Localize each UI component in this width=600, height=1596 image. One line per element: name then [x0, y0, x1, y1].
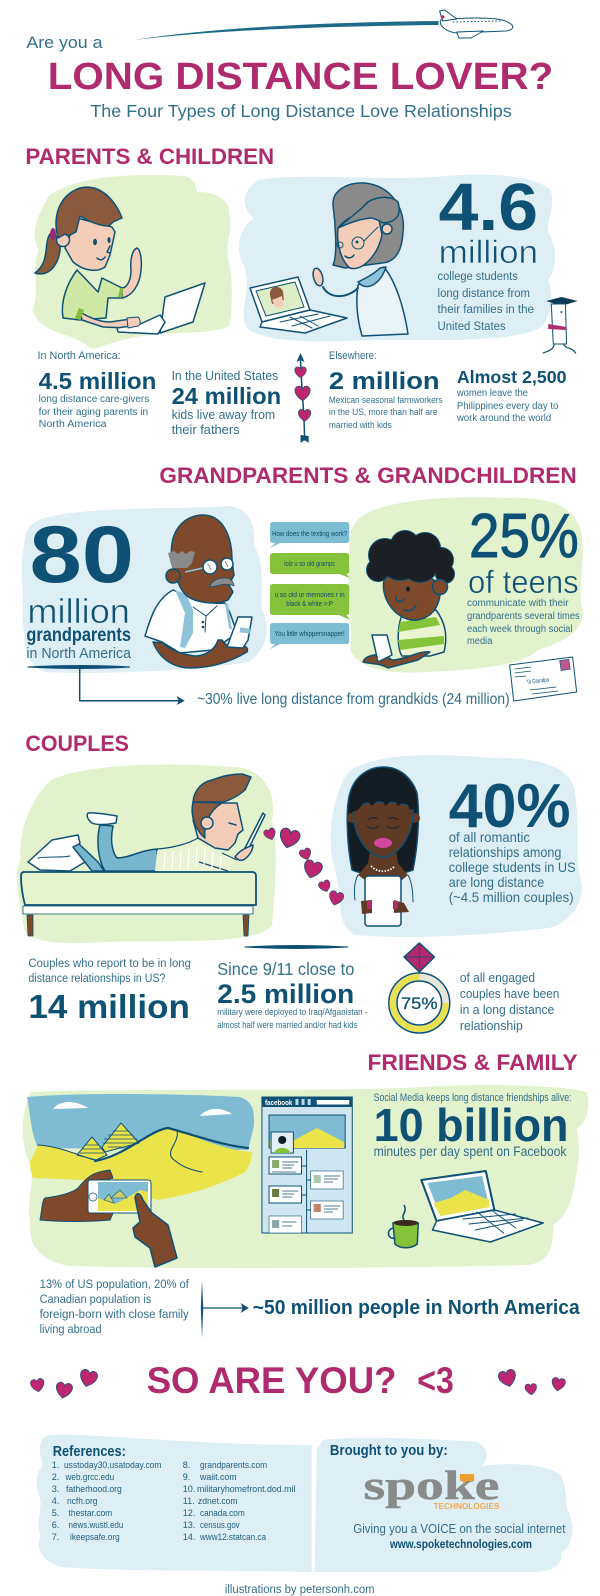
stat: US kids: their fathers — [172, 422, 240, 437]
reference list column two: 8. — [183, 1460, 190, 1470]
panel: references — [37, 1435, 312, 1572]
stat: 25 percent of teens: of teens — [468, 564, 579, 600]
reference list column two: 13. — [183, 1520, 195, 1530]
reference list column two: 10. — [183, 1484, 195, 1494]
reference list column one — [52, 1460, 161, 1542]
stat: 40 percent romantic: (~4.5 million couples) — [449, 889, 574, 905]
reference list column two: waiit.com — [199, 1472, 237, 1482]
title: LONG DISTANCE LOVER? — [48, 55, 553, 98]
illustration: facebook page — [262, 1097, 352, 1233]
stat: US kids: In the United States — [172, 368, 279, 383]
stat: North America caregivers: North America — [39, 418, 107, 430]
stat: 40 percent romantic: 40% — [449, 771, 571, 841]
panel: grandparents and grandchildren — [22, 463, 583, 708]
stat: 80 million grandparents: grandparents — [26, 625, 131, 646]
logo: spoke technologies: TECHNOLOGIES — [434, 1501, 500, 1511]
stat: 80 million grandparents: 80 — [29, 510, 134, 600]
stat: 25 percent of teens: grandparents several times — [467, 610, 580, 622]
stat: North America caregivers: 4.5 million — [39, 368, 156, 394]
stat: North America caregivers: In North America: — [38, 350, 121, 362]
reference list column one: fatherhood.org — [66, 1484, 122, 1494]
stat: 4.6 million students: their families in the — [438, 302, 534, 316]
stat: foreign born: 13% of US population, 20% of — [40, 1277, 189, 1291]
illustration: desert photo with hands — [27, 1094, 254, 1267]
stat: Philippines women: Philippines every day to — [457, 400, 558, 412]
call to action: <3 — [417, 1359, 454, 1401]
stat: Mexican farmworkers — [329, 350, 443, 431]
panel: references: References: — [53, 1443, 126, 1460]
logo: spoke technologies — [363, 1462, 500, 1511]
stat: 2.5 million military — [217, 946, 368, 1030]
stat: US kids — [172, 368, 281, 437]
chart: 75 percent ring: 75% — [401, 994, 438, 1013]
stat: Philippines women: Almost 2,500 — [457, 367, 566, 387]
stat: 4.6 million students: United States — [438, 319, 506, 333]
blue backdrop — [239, 175, 555, 342]
stat: 25 percent of teens: 25% — [469, 501, 579, 571]
stat: Mexican farmworkers: in the US, more than half are — [329, 407, 438, 418]
green backdrop — [17, 764, 276, 943]
reference list column one: thestar.com — [69, 1508, 112, 1518]
reference list column one: news.wustl.edu — [69, 1520, 123, 1530]
stat: 25 percent of teens: communicate with their — [467, 597, 569, 609]
stat: 50 million people: ~50 million people in North America — [253, 1297, 580, 1319]
stat: Philippines women: work around the world — [456, 412, 551, 424]
stat: 14 million couples: Couples who report to be in long — [28, 956, 191, 970]
blue backdrop — [331, 755, 582, 937]
stat: 30 percent live long distance: ~30% live long distance from grandkids (24 million) — [197, 690, 510, 708]
reference list column one: 4. — [52, 1496, 59, 1506]
chat bubble: reply two — [270, 584, 350, 620]
illustration: facebook page: facebook — [265, 1100, 292, 1107]
chart: 75 percent ring — [389, 943, 450, 1033]
reference list column one: 6. — [52, 1520, 59, 1530]
icon: right hearts — [497, 1369, 566, 1395]
reference list column one: 1. — [52, 1460, 59, 1470]
reference list column two: 12. — [183, 1508, 195, 1518]
stat: North America caregivers: for their aging parents in — [39, 406, 148, 418]
stat: 40 percent romantic: college students in US — [449, 859, 576, 875]
heading: COUPLES — [25, 731, 129, 756]
stat: foreign born — [40, 1277, 190, 1336]
stat: North America caregivers — [38, 350, 156, 430]
stat: foreign born: living abroad — [40, 1322, 102, 1336]
illustration: flying hearts — [263, 827, 345, 907]
stat: 4.6 million students: college students — [438, 269, 518, 283]
reference list column two: canada.com — [200, 1508, 245, 1518]
stat: 10 billion minutes: minutes per day spent on Facebook — [374, 1143, 567, 1159]
stat: foreign born: foreign-born with close family — [40, 1307, 190, 1321]
icon: airplane with trail — [134, 10, 513, 40]
call to action — [30, 1359, 566, 1401]
stat: 2.5 million military: almost half were married and/or had kids — [217, 1020, 358, 1030]
stat: engaged couples — [460, 970, 559, 1033]
stat: 40 percent romantic — [449, 771, 576, 905]
subtitle: The Four Types of Long Distance Love Relationships — [90, 101, 512, 121]
panel: sponsor: Giving you a VOICE on the social internet — [353, 1521, 566, 1536]
icon: arrow with hearts — [295, 353, 311, 443]
stat: 40 percent romantic: of all romantic — [449, 829, 530, 845]
illustration: boy with phone — [363, 530, 455, 668]
stat: Mexican farmworkers: Elsewhere: — [329, 350, 377, 362]
stat: 14 million couples: 14 million — [28, 989, 190, 1026]
chat bubble: question: How does the texting work? — [272, 531, 347, 538]
icon: left hearts — [30, 1369, 98, 1399]
stat: 25 percent of teens: each week through social — [467, 623, 573, 635]
stat: 40 percent romantic: are long distance — [449, 874, 544, 890]
reference list column one: 5. — [52, 1508, 59, 1518]
heading: GRANDPARENTS & GRANDCHILDREN — [159, 463, 577, 488]
reference list column one: ikeepsafe.org — [70, 1532, 120, 1542]
illustration: woman with tablet — [347, 767, 420, 926]
reference list column one: 7. — [52, 1532, 59, 1542]
reference list column two: www12.statcan.ca — [199, 1532, 267, 1542]
reference list column two: census.gov — [200, 1520, 240, 1530]
chat bubble: response: You little whippersnapper! — [275, 631, 345, 638]
stat: 25 percent of teens: media — [467, 635, 492, 647]
stat: 2.5 million military: 2.5 million — [217, 978, 354, 1009]
stat: 4.6 million students — [438, 170, 538, 333]
arrow: grandparents to long distance — [27, 666, 185, 705]
stat: 2.5 million military: Since 9/11 close to — [217, 959, 354, 979]
stat: 14 million couples: distance relationships in US? — [28, 971, 166, 985]
reference list column one: 2. — [52, 1472, 59, 1482]
stat: Mexican farmworkers: Mexican seasonal farmworkers — [329, 395, 443, 406]
reference list column two — [183, 1460, 295, 1542]
stat: Philippines women: women leave the — [456, 387, 528, 399]
stat: Mexican farmworkers: married with kids — [329, 420, 392, 431]
icon: envelope — [510, 657, 577, 701]
stat: engaged couples: relationship — [460, 1018, 523, 1033]
green backdrop — [32, 175, 232, 348]
stat: 80 million grandparents — [26, 510, 134, 662]
reference list column one: 3. — [52, 1484, 59, 1494]
reference list column two: 14. — [183, 1532, 195, 1542]
stat: 14 million couples — [28, 956, 191, 1026]
chat bubble: reply one — [270, 553, 350, 578]
reference list column one: web.grcc.edu — [65, 1472, 114, 1482]
panel: sponsor: www.spoketechnologies.com — [389, 1537, 532, 1551]
stat: 4.6 million students: long distance from — [438, 286, 530, 300]
heading: PARENTS & CHILDREN — [25, 144, 274, 169]
icon: diploma character — [543, 297, 578, 353]
chat bubble: reply one: lolz u so old gramps — [284, 561, 335, 568]
reference list column two: 9. — [183, 1472, 190, 1482]
stat: engaged couples: in a long distance — [460, 1002, 554, 1017]
reference list column two: militaryhomefront.dod.mil — [197, 1484, 295, 1494]
heading: FRIENDS & FAMILY — [368, 1050, 578, 1075]
green backdrop — [23, 1085, 588, 1268]
stat: North America caregivers: long distance care-givers — [39, 393, 149, 405]
chat bubble: reply two: u so old ur memories r in — [275, 592, 345, 599]
reference list column two: grandparents.com — [200, 1460, 267, 1470]
intro line: Are you a — [26, 33, 103, 52]
logo: spoke technologies: spoke — [363, 1462, 499, 1508]
stat: US kids: kids live away from — [172, 407, 275, 422]
illustration: mother on laptop — [250, 183, 408, 336]
panel: parents and children — [25, 144, 578, 443]
chat bubble: response — [270, 623, 349, 649]
stat: engaged couples: of all engaged — [460, 970, 535, 985]
illustration: girl on laptop — [35, 187, 205, 334]
stat: engaged couples: couples have been — [460, 986, 559, 1001]
illustration: grandfather with phone — [145, 515, 252, 668]
stat: 4.6 million students: 4.6 — [439, 170, 538, 245]
panel: sponsor: Brought to you by: — [330, 1442, 448, 1459]
reference list column one: usstoday30.usatoday.com — [64, 1460, 161, 1470]
chat bubble: question — [270, 522, 349, 548]
header — [26, 10, 553, 121]
blue backdrop — [22, 506, 267, 673]
reference list column two: zdnet.com — [198, 1496, 238, 1506]
stat: 2.5 million military: military were deployed to Iraq/Afganistan - — [217, 1007, 368, 1017]
call to action: SO ARE YOU? — [147, 1359, 396, 1401]
panel: couples — [17, 731, 582, 1033]
reference list column one: ncfh.org — [67, 1496, 97, 1506]
illustration: man on sofa — [21, 774, 265, 936]
stat: 25 percent of teens — [467, 501, 580, 647]
green backdrop — [349, 497, 583, 673]
panel: sponsor — [315, 1438, 572, 1572]
stat: 80 million grandparents: million — [27, 593, 130, 631]
chat bubble: reply two: black & white >:P — [286, 601, 333, 608]
arrow: foreign born to total — [201, 1280, 249, 1338]
stat: US kids: 24 million — [172, 383, 281, 409]
stat: 80 million grandparents: in North America — [26, 645, 132, 662]
stat: Mexican farmworkers: 2 million — [329, 368, 440, 395]
icon: envelope: To Grandpa — [526, 677, 550, 686]
stat: 40 percent romantic: relationships among — [449, 844, 561, 860]
stat: 10 billion minutes: 10 billion — [374, 1099, 569, 1151]
reference list column two: 11. — [183, 1496, 195, 1506]
credit: illustrations by petersonh.com — [225, 1582, 375, 1596]
stat: foreign born: Canadian population is — [40, 1292, 151, 1306]
stat: Philippines women — [456, 367, 566, 424]
illustration: laptop and coffee — [388, 1171, 543, 1248]
stat: 4.6 million students: million — [439, 234, 538, 270]
panel: friends and family — [23, 1050, 588, 1338]
